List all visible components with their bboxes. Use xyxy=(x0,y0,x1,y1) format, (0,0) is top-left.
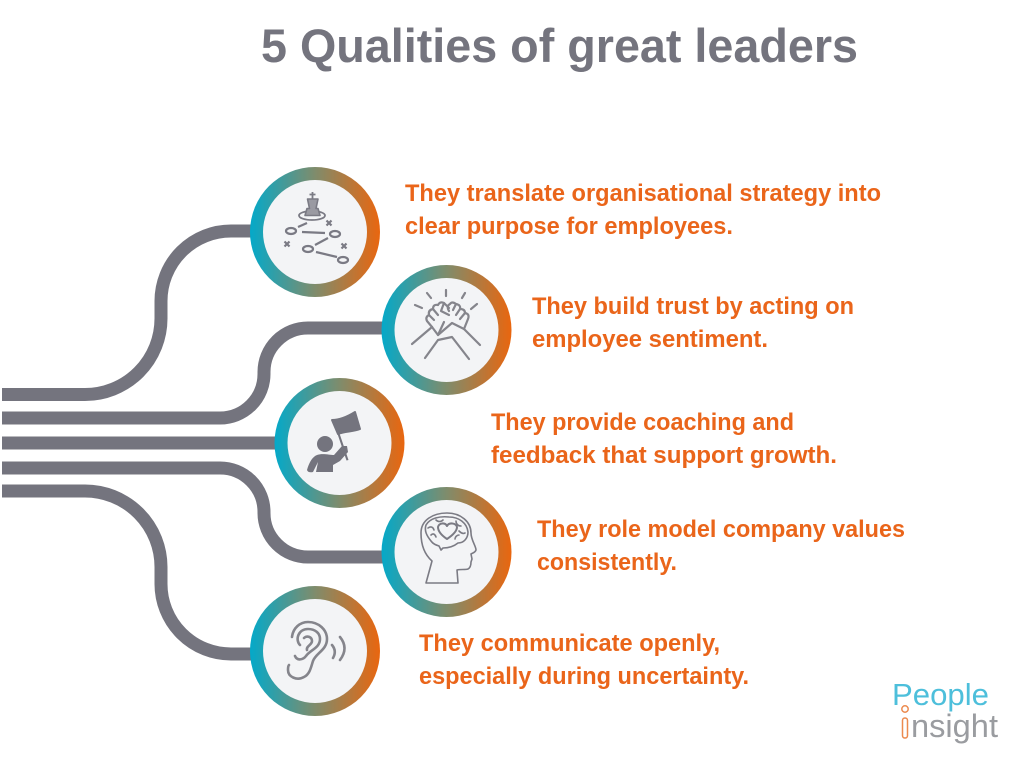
icon: chess king strategy map xyxy=(284,192,348,263)
text block 4: consistently. xyxy=(537,549,677,576)
connector 1 xyxy=(2,231,255,394)
logo: People Insight xyxy=(892,677,998,744)
text block 3: They provide coaching and xyxy=(491,409,794,436)
icon: head with brain and heart xyxy=(421,513,476,583)
icon: clasped hands xyxy=(412,290,480,359)
connector 4 xyxy=(2,468,385,557)
text block 2: They build trust by acting on xyxy=(532,293,854,320)
text block 3: feedback that support growth. xyxy=(491,442,837,469)
icon: person with flag xyxy=(307,412,360,472)
icon: ear with sound waves xyxy=(288,622,344,679)
connector 5 xyxy=(2,491,255,654)
logo: People Insight: nsight xyxy=(911,708,998,744)
text block 1: They translate organisational strategy into xyxy=(405,180,881,207)
connector lines xyxy=(2,231,385,654)
text block 5 xyxy=(419,630,749,690)
text block 1: clear purpose for employees. xyxy=(405,213,733,240)
circle 5: listening ear xyxy=(250,586,380,716)
circle 2: trust handshake xyxy=(382,265,512,395)
text block 5: They communicate openly, xyxy=(419,630,720,657)
text block 4 xyxy=(537,516,905,576)
circle 3: coaching flag xyxy=(274,378,404,508)
circle 1: strategy xyxy=(250,167,380,297)
text block 1 xyxy=(405,180,881,240)
logo: People Insight: People xyxy=(892,677,989,712)
logo letter i xyxy=(902,706,908,738)
text block 5: especially during uncertainty. xyxy=(419,663,749,690)
connector 2 xyxy=(2,328,385,418)
text block 2 xyxy=(532,293,854,353)
text block 2: employee sentiment. xyxy=(532,326,768,353)
text block 3 xyxy=(491,409,837,469)
circle 4: values head xyxy=(382,487,512,617)
text block 4: They role model company values xyxy=(537,516,905,543)
title: 5 Qualities of great leaders xyxy=(261,19,858,72)
connector 3 xyxy=(2,436,280,450)
